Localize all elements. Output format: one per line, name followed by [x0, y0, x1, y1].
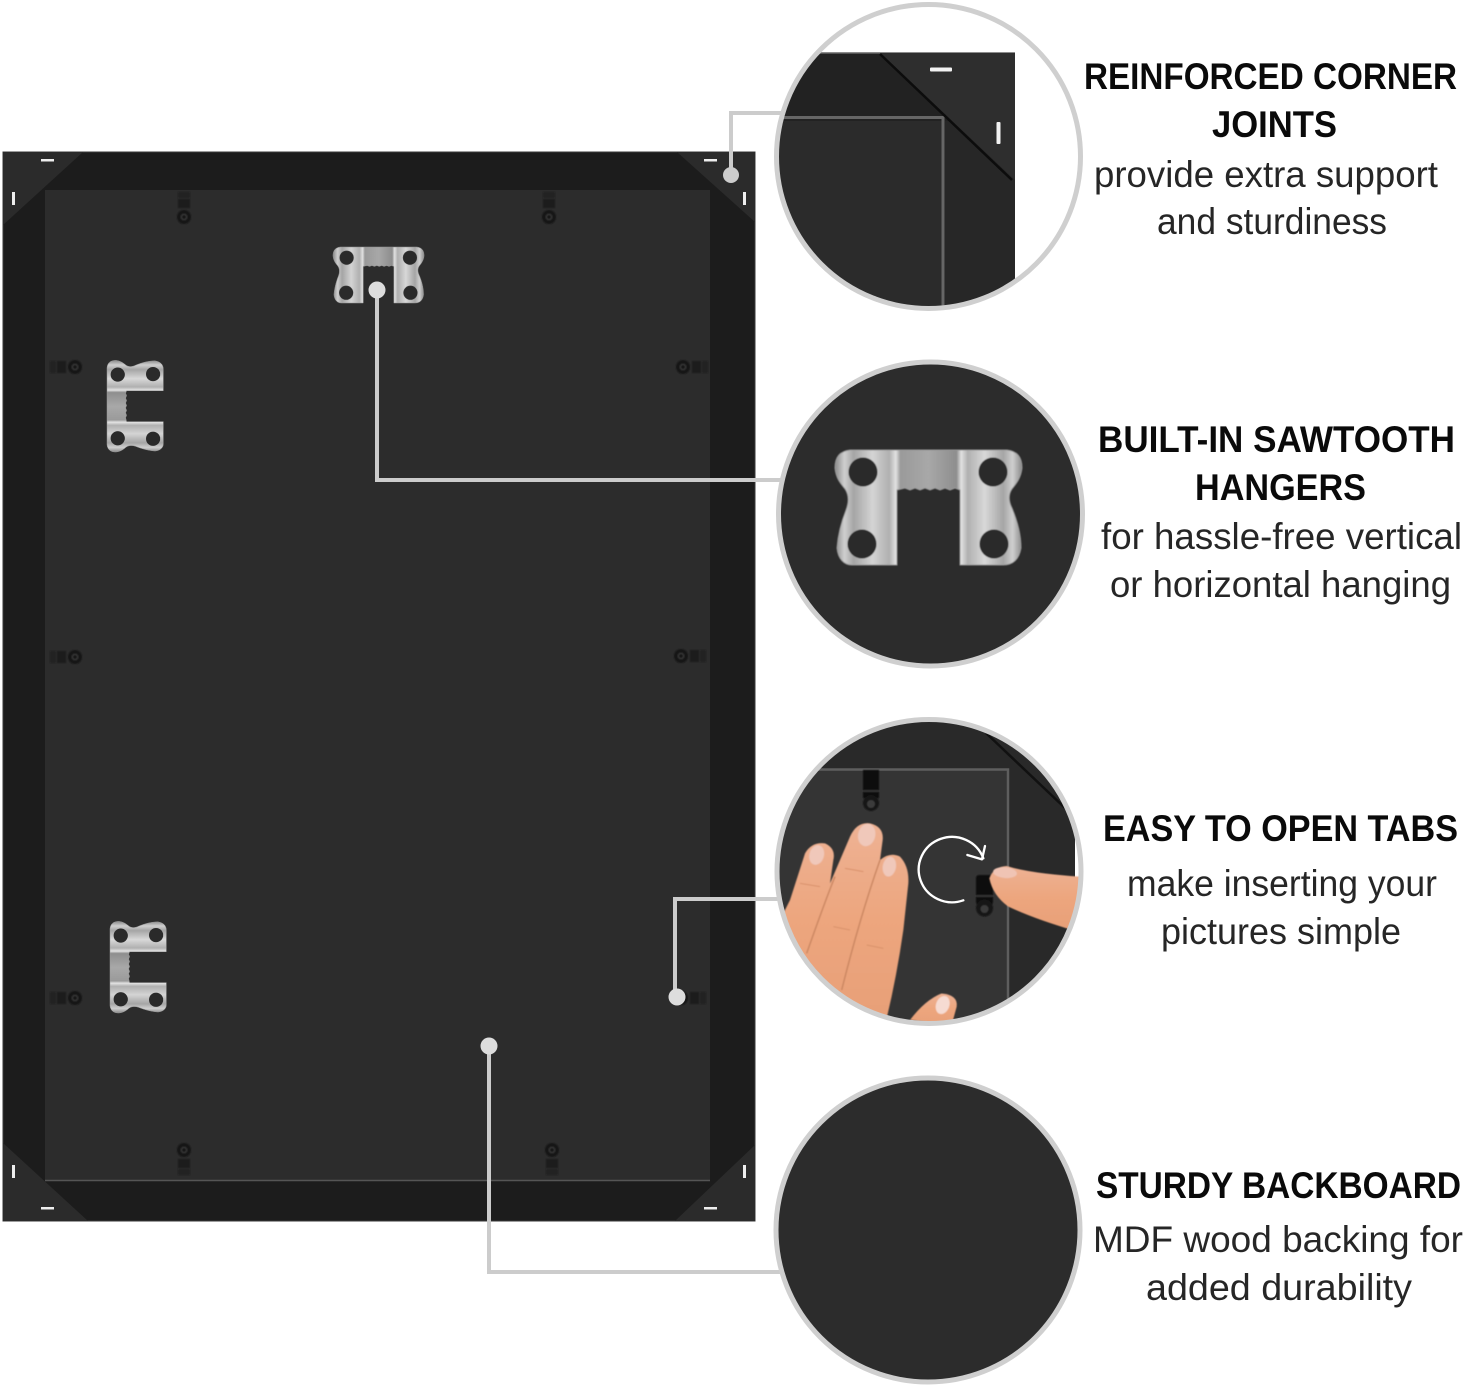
- connector: corner joints: [723, 113, 782, 183]
- text block: reinforced corner joints: and sturdiness: [1157, 201, 1387, 242]
- text block: built-in sawtooth hangers: or horizontal hanging: [1110, 564, 1451, 605]
- hand: [777, 822, 1080, 1025]
- text block: built-in sawtooth hangers: for hassle-free vertical: [1101, 516, 1462, 557]
- text block: reinforced corner joints: [1084, 56, 1457, 242]
- text block: built-in sawtooth hangers: BUILT-IN SAWTOOTH: [1098, 419, 1455, 460]
- panel: frame back: [3, 152, 755, 1221]
- frame outer border: [3, 152, 755, 1221]
- text block: sturdy backboard: added durability: [1146, 1267, 1412, 1308]
- corner joints: [3, 152, 755, 1221]
- connector: tabs: [668, 899, 782, 1006]
- text block: reinforced corner joints: JOINTS: [1212, 104, 1337, 145]
- text block: sturdy backboard: MDF wood backing for: [1093, 1219, 1463, 1260]
- sawtooth hanger: left upper: [107, 360, 163, 452]
- circle: corner detail: [770, 4, 1082, 323]
- rotate arrow: [919, 837, 985, 902]
- circle: backboard detail: [776, 1078, 1080, 1382]
- text block: sturdy backboard: [1093, 1165, 1463, 1308]
- hanger close-up: [835, 450, 1022, 565]
- text block: easy to open tabs: pictures simple: [1161, 911, 1401, 952]
- text block: easy to open tabs: [1103, 808, 1458, 952]
- text block: built-in sawtooth hangers: HANGERS: [1195, 467, 1366, 508]
- backboard: [45, 190, 710, 1180]
- opening tabs: [50, 192, 708, 1175]
- text block: built-in sawtooth hangers: [1098, 419, 1462, 605]
- connector: sawtooth hangers: [368, 282, 782, 480]
- sawtooth hanger: top: [333, 247, 424, 303]
- pressing finger: [989, 866, 1080, 930]
- sawtooth hanger: left lower: [110, 921, 166, 1013]
- corner slots: [12, 159, 746, 1210]
- circle: tabs detail: [770, 715, 1087, 1035]
- connector: backboard: [480, 1038, 782, 1272]
- circle: sawtooth hanger detail: [778, 362, 1082, 666]
- text block: reinforced corner joints: provide extra support: [1094, 154, 1439, 195]
- text block: easy to open tabs: make inserting your: [1127, 863, 1437, 904]
- thumb: [910, 993, 957, 1025]
- fold tab upper: [863, 770, 879, 811]
- fold tab lower: [976, 875, 993, 916]
